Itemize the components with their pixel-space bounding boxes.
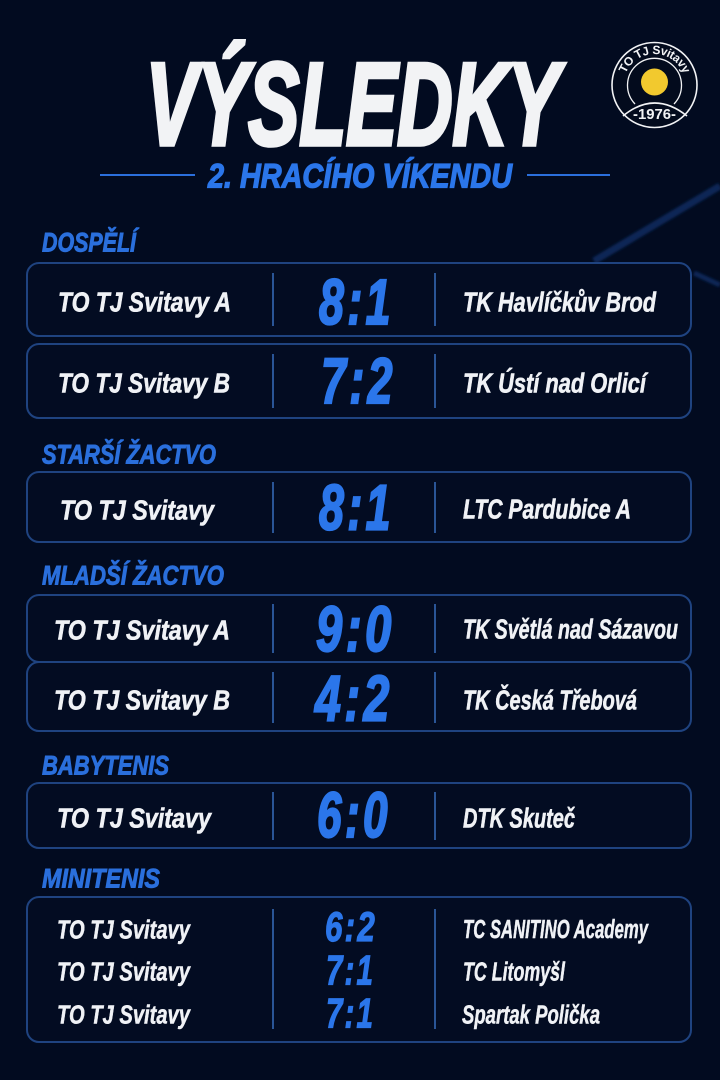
panel: minitenis results: TC Litomyšl	[463, 958, 566, 986]
logo: TO TJ Svitavy 1976: -1976-	[633, 107, 676, 123]
match: Svitavy B vs Česká Třebová	[27, 662, 691, 734]
match: Svitavy A vs Havlíčkův Brod	[27, 263, 691, 338]
match: Svitavy A vs Světlá nad Sázavou	[27, 593, 691, 665]
match: Svitavy A vs Havlíčkův Brod: TK Havlíčkův Brod	[463, 286, 657, 318]
logo: TO TJ Svitavy 1976: TO TJ Svitavy	[618, 46, 690, 72]
heading: Babytenis: BABYTENIS	[42, 750, 169, 780]
match: Svitavy B vs Česká Třebová: 4:2	[314, 662, 393, 734]
match: Svitavy vs DTK Skuteč: TO TJ Svitavy	[57, 802, 212, 834]
heading: Starší žactvo: STARŠÍ ŽACTVO	[42, 440, 216, 470]
match: Svitavy B vs Ústí nad Orlicí: 7:2	[321, 345, 396, 417]
match: Svitavy A vs Havlíčkův Brod: TO TJ Svitavy A	[58, 286, 231, 318]
logo: TO TJ Svitavy 1976	[611, 42, 698, 128]
match: Svitavy vs LTC Pardubice A: TO TJ Svitavy	[60, 494, 215, 526]
match: Svitavy vs LTC Pardubice A	[27, 472, 691, 544]
match: Svitavy vs LTC Pardubice A: 8:1	[319, 472, 394, 544]
match: Svitavy A vs Světlá nad Sázavou: TO TJ Svitavy A	[54, 614, 230, 646]
subtitle: 2. HRACÍHO VÍKENDU	[207, 158, 513, 196]
match: Svitavy B vs Ústí nad Orlicí: TO TJ Svitavy B	[58, 368, 230, 398]
panel: minitenis results: TO TJ Svitavy	[57, 1002, 191, 1030]
match: Svitavy B vs Ústí nad Orlicí: TK Ústí nad Orlicí	[463, 368, 648, 398]
panel: minitenis results: TO TJ Svitavy	[57, 958, 191, 986]
match: Svitavy A vs Havlíčkův Brod: 8:1	[319, 266, 394, 338]
panel: minitenis results	[27, 897, 691, 1042]
match: Svitavy vs DTK Skuteč: DTK Skuteč	[463, 802, 575, 834]
match: Svitavy B vs Ústí nad Orlicí	[27, 344, 691, 418]
heading: Dospělí: DOSPĚLÍ	[42, 228, 140, 258]
panel: minitenis results: 6:2	[325, 903, 377, 950]
match: Svitavy B vs Česká Třebová: TK Česká Třebová	[463, 684, 637, 716]
heading: Minitenis: MINITENIS	[42, 864, 160, 894]
background streak	[594, 186, 720, 285]
match: Svitavy B vs Česká Třebová: TO TJ Svitavy B	[54, 684, 230, 716]
match: Svitavy vs DTK Skuteč	[27, 779, 691, 851]
heading: Mladší žactvo: MLADŠÍ ŽACTVO	[42, 560, 224, 590]
match: Svitavy vs DTK Skuteč: 6:0	[317, 779, 391, 851]
panel: minitenis results: 7:1	[326, 990, 375, 1036]
panel: minitenis results: Spartak Polička	[462, 1002, 600, 1030]
match: Svitavy A vs Světlá nad Sázavou: 9:0	[316, 593, 395, 665]
panel: minitenis results: 7:1	[326, 946, 375, 994]
match: Svitavy vs LTC Pardubice A: LTC Pardubice A	[463, 494, 631, 524]
panel: minitenis results: TO TJ Svitavy	[57, 916, 191, 944]
